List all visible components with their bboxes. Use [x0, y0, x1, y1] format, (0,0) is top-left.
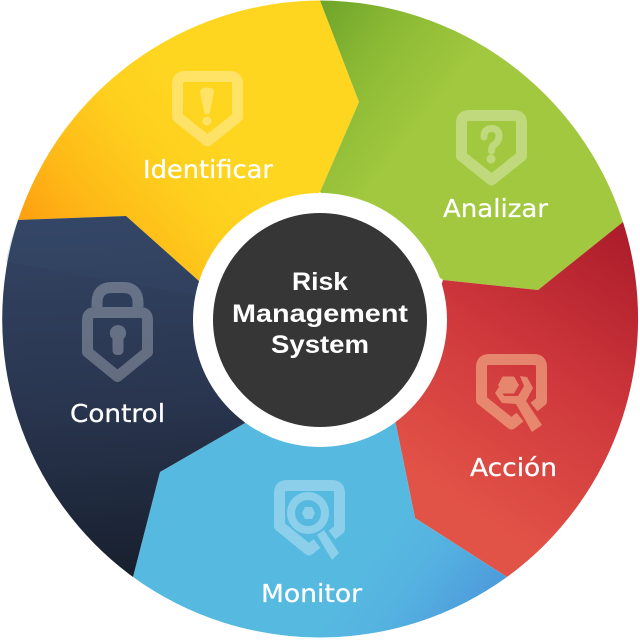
center hub ring [193, 193, 447, 447]
center hub [213, 213, 427, 427]
label: Acción: Acción [470, 453, 557, 482]
segment: Control [2, 216, 245, 577]
center title: System [271, 331, 369, 359]
icon: question shield [462, 116, 522, 180]
center title: Management [232, 300, 409, 328]
segment: Analizar [320, 0, 623, 290]
label: Identificar: Identificar [143, 155, 274, 184]
center title [232, 268, 409, 359]
label: Analizar: Analizar [443, 194, 549, 223]
label: Monitor: Monitor [261, 579, 363, 608]
center title: Risk [292, 268, 348, 296]
icon: wrench shield [482, 360, 542, 432]
icon: warning shield [178, 76, 238, 141]
icon: padlock shield [88, 288, 148, 376]
icon: magnifier shield [280, 486, 340, 560]
label: Control: Control [70, 399, 165, 428]
segment: Acción [395, 222, 638, 577]
segment: Identificar [18, 0, 359, 282]
segment: Monitor [133, 420, 507, 637]
